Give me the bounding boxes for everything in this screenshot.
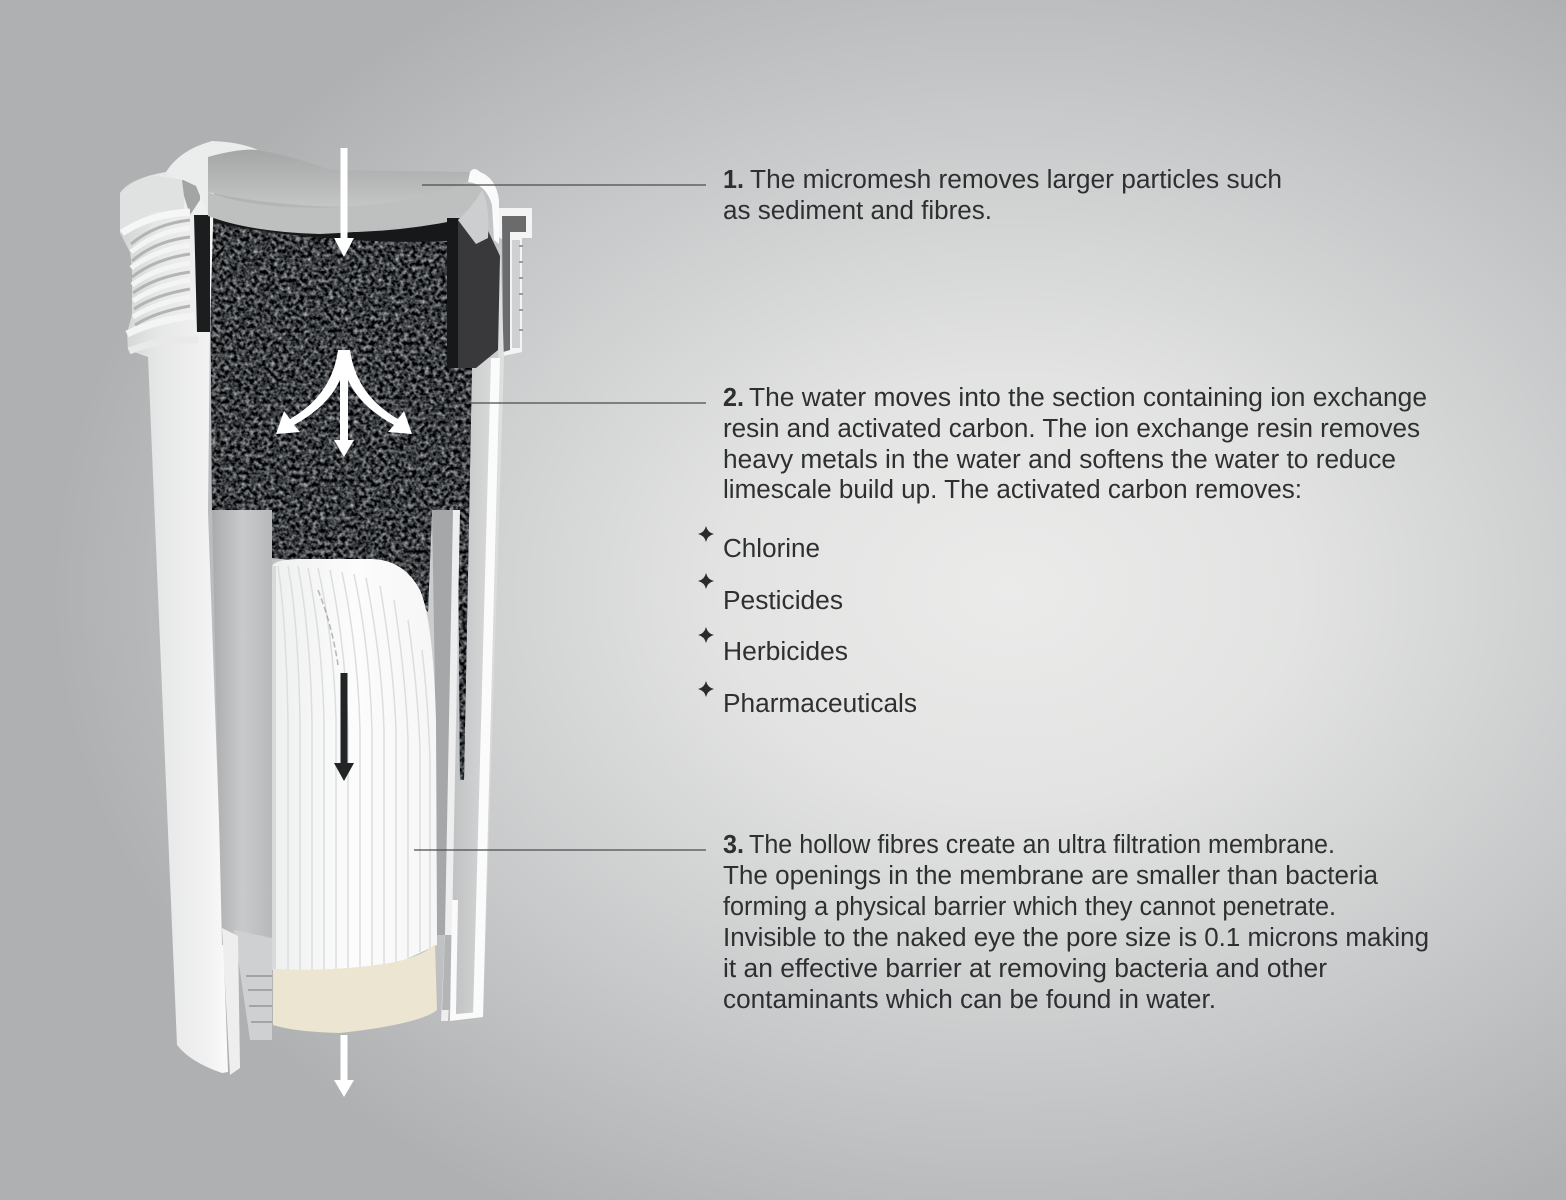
black seal block, left <box>194 215 210 332</box>
arrow: filtered water out <box>334 1035 354 1097</box>
step 2 text: limescale build up. The activated carbon removes: <box>723 476 1302 504</box>
item: pharmaceuticals: Pharmaceuticals <box>723 690 917 718</box>
inner tube, right <box>432 510 483 1021</box>
step 3 text: contaminants which can be found in water. <box>723 986 1216 1014</box>
hollow fibre bundle <box>272 559 437 970</box>
arrow: into micromesh <box>334 148 354 257</box>
inner tube, left <box>212 510 272 1075</box>
bullet star <box>698 681 714 697</box>
step 2 text: 2. <box>723 384 744 412</box>
step 3 text <box>723 831 1429 1014</box>
step 2 text <box>723 384 1427 504</box>
step 3 text: 3. <box>723 831 744 859</box>
carbon granule chamber <box>210 222 472 780</box>
leader line 1 <box>422 184 706 186</box>
step 3 text: The hollow fibres create an ultra filtration membrane. <box>749 831 1335 859</box>
filter cartridge cross-section <box>120 141 532 1075</box>
step 3 text: The openings in the membrane are smaller than bacteria <box>723 862 1379 890</box>
cap body, threads and left pillar <box>120 142 228 1073</box>
leader line 3 <box>414 849 706 851</box>
bullet star <box>698 627 714 643</box>
step 3 text: forming a physical barrier which they cannot penetrate. <box>723 893 1336 921</box>
item: chlorine: Chlorine <box>723 535 820 563</box>
cream potting band <box>273 944 437 1033</box>
step 2 text: The water moves into the section containing ion exchange <box>749 384 1427 412</box>
outer wall, right <box>450 240 504 1021</box>
item: pesticides: Pesticides <box>723 587 843 615</box>
step 1 text <box>723 166 1282 225</box>
black seal block, right <box>210 217 500 368</box>
step 2 text: heavy metals in the water and softens the water to reduce <box>723 446 1396 474</box>
bullet star <box>698 573 714 589</box>
step 3 text: Invisible to the naked eye the pore size is 0.1 microns making <box>723 924 1429 952</box>
screw thread ribs <box>122 212 198 351</box>
step 1 text: as sediment and fibres. <box>723 197 992 225</box>
step 3 text: it an effective barrier at removing bacteria and other <box>723 955 1328 983</box>
right side clip tab <box>497 208 532 356</box>
step 1 text: The micromesh removes larger particles such <box>750 166 1282 194</box>
list of contaminants removed <box>698 526 917 718</box>
leader line 2 <box>468 402 706 404</box>
bullet star <box>698 526 714 542</box>
arrow: through fibres <box>334 673 354 781</box>
cap rim, right <box>468 169 499 244</box>
item: herbicides: Herbicides <box>723 638 848 666</box>
step 1 text: 1. <box>723 166 744 194</box>
arrows: spreading through carbon <box>276 350 412 457</box>
micromesh disc <box>208 150 485 234</box>
top rim of cap <box>166 141 258 215</box>
step 2 text: resin and activated carbon. The ion exchange resin removes <box>723 415 1420 443</box>
